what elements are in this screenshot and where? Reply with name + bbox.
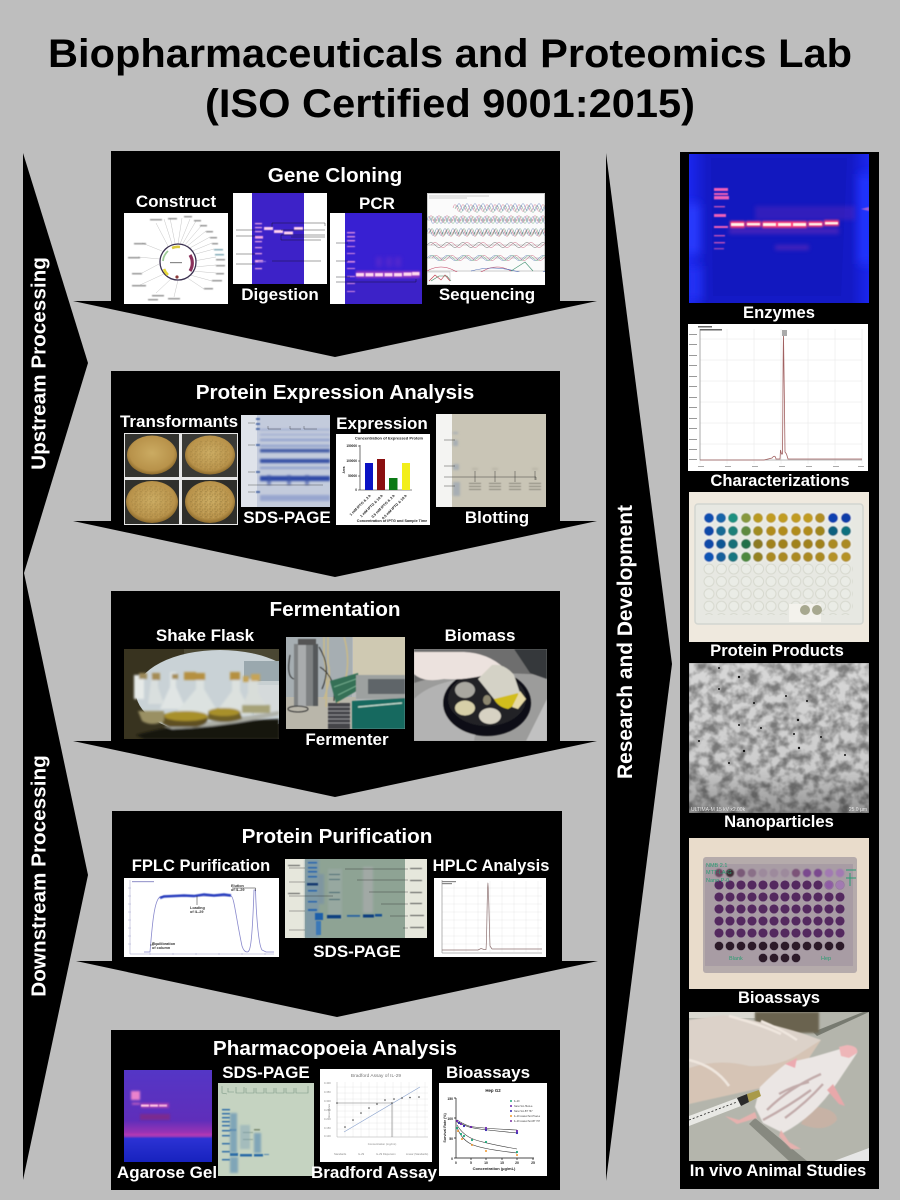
- chart: expression bars: 100000: [346, 459, 357, 463]
- chart: bradford assay: 0.350: [324, 1090, 331, 1094]
- image: western blot: [436, 414, 546, 507]
- chart: bradford assay: 0.100: [324, 1134, 331, 1138]
- label: enzymes: Enzymes: [743, 303, 815, 322]
- chart: bioassay survival curves: 5: [470, 1161, 472, 1165]
- title: Biopharmaceuticals and Proteomics Lab: [48, 32, 852, 76]
- image: bioassay plate: Nano P-0: [706, 878, 729, 884]
- label: digestion: Digestion: [241, 285, 319, 304]
- label: bradford assay: Bradford Assay: [311, 1163, 438, 1182]
- label: transformants: Transformants: [120, 412, 238, 431]
- arrow: downstream processing: [23, 573, 88, 1180]
- chart: bioassay survival curves: 50: [449, 1137, 453, 1141]
- label: sds-page: SDS-PAGE: [313, 942, 401, 961]
- label: in vivo animal studies: In vivo Animal Studies: [690, 1161, 866, 1180]
- chart: expression bars: Concentration of IPTG and Sample Time: [357, 519, 427, 523]
- chart: bradford assay: IL-29 Dispersion: [376, 1152, 396, 1156]
- image: bioassay plate: Blank: [729, 956, 743, 962]
- chart: fplc trace: Loading: [190, 906, 205, 910]
- image: in vivo mouse study: [689, 1012, 869, 1161]
- image: nanoparticles micrograph: ULTIMA-M 15 kV x2.00k: [691, 807, 746, 813]
- chart: bioassay survival curves: 15: [500, 1161, 504, 1165]
- label: bioassays: Bioassays: [446, 1063, 530, 1082]
- label: sds-page: SDS-PAGE: [243, 508, 331, 527]
- heading: gene cloning: Gene Cloning: [268, 164, 402, 187]
- panel: gene cloning: [73, 151, 597, 357]
- image: nanoparticles micrograph: 25.0 µm: [849, 807, 867, 813]
- chart: fplc trace: of IL-29: [231, 888, 245, 892]
- image: fermenter: [286, 637, 405, 729]
- chart: expression bars: 0.5 mM IPTG & 3 h: [371, 494, 396, 519]
- chart: bioassay survival curves: 20: [515, 1161, 519, 1165]
- chart: expression bars: Area: [342, 466, 346, 474]
- panel: protein purification: [76, 811, 598, 1017]
- chart: fplc trace: Equilibration: [152, 942, 176, 946]
- heading: protein expression analysis: Protein Expression Analysis: [196, 381, 474, 404]
- label: biomass: Biomass: [445, 626, 515, 645]
- chart: bioassay survival curves: Concentration (µg/mL): [473, 1166, 516, 1171]
- image: pcr gel: [330, 213, 422, 304]
- image: agarose gel: [124, 1070, 212, 1162]
- label: expression: Expression: [336, 414, 428, 433]
- label: blotting: Blotting: [465, 508, 529, 527]
- label: fermenter: Fermenter: [305, 730, 389, 749]
- chart: expression bars: 1 mM IPTG & 18 h: [359, 494, 384, 518]
- chart: bradford assay: 0.300: [324, 1099, 331, 1103]
- label: hplc analysis: HPLC Analysis: [433, 857, 549, 875]
- chart: bradford assay: 0.400: [324, 1081, 331, 1085]
- chart: bradford assay: Linear (Standards): [406, 1152, 428, 1156]
- chart: bioassay survival curves: Nano Sor-BT 767: [514, 1110, 533, 1113]
- chart: bioassay survival curves: IL-29 coated Sor-BT 767: [514, 1120, 541, 1123]
- heading: protein purification: Protein Purification: [242, 825, 432, 848]
- chart: expression bars: 1 mM IPTG & 3 h: [349, 494, 372, 517]
- chart: expression bars: 0: [355, 488, 357, 492]
- chart: bradford assay: Standards: [334, 1152, 347, 1156]
- panel: protein expression analysis: [73, 371, 597, 577]
- label: sequencing: Sequencing: [439, 285, 535, 304]
- chart: bioassay survival curves: 25: [531, 1161, 535, 1165]
- image: biomass centrifuge: [414, 649, 547, 741]
- image: pharmacopoeia sds-page: [218, 1083, 314, 1176]
- chart: fplc trace: of column: [152, 946, 171, 950]
- arrow: upstream processing: [23, 153, 88, 573]
- title: [48, 32, 852, 126]
- chart: bioassay survival curves: [439, 1083, 547, 1176]
- arrow: downstream processing: Downstream Processing: [28, 755, 50, 997]
- arrow: research and development: [606, 153, 672, 1181]
- arrow: upstream processing: Upstream Processing: [28, 257, 50, 470]
- image: bioassay plate: Hep: [821, 956, 831, 962]
- title: (ISO Certified 9001:2015): [205, 82, 695, 126]
- chart: bradford assay: 0.200: [324, 1117, 331, 1121]
- label: agarose gel: Agarose Gel: [117, 1163, 217, 1182]
- chart: expression bars: 150000: [346, 444, 357, 448]
- heading: pharmacopoeia analysis: Pharmacopoeia Analysis: [213, 1037, 457, 1060]
- panel: fermentation: [73, 591, 597, 797]
- label: construct: Construct: [136, 192, 216, 211]
- heading: fermentation: Fermentation: [269, 598, 401, 621]
- chart: bradford assay: [320, 1069, 432, 1162]
- chart: bioassay survival curves: 10: [484, 1161, 488, 1165]
- chart: fplc trace: Elution: [231, 884, 245, 888]
- label: protein products: Protein Products: [710, 641, 844, 660]
- chart: characterization chromatogram: [688, 324, 868, 471]
- chart: expression bars: Concentration of Expressed Protein: [355, 436, 424, 440]
- image: plasmid construct map: [124, 213, 228, 304]
- image: bioassay plate: [689, 838, 869, 989]
- label: fplc purification: FPLC Purification: [132, 857, 270, 875]
- chart: hplc trace: [434, 878, 546, 957]
- chart: bradford assay: Bradford Assay of IL-29: [351, 1073, 401, 1079]
- image: purification sds-page: [285, 859, 427, 938]
- chart: bioassay survival curves: 0: [455, 1161, 457, 1165]
- label: nanoparticles: Nanoparticles: [724, 812, 834, 831]
- chart: fplc trace: of IL-29: [190, 910, 204, 914]
- chart: expression bars: [336, 434, 430, 525]
- chart: bradford assay: 0.150: [324, 1126, 331, 1130]
- image: bioassay plate: MTT-LA-G: [706, 870, 732, 876]
- image: transformant plates: [124, 433, 238, 525]
- chart: bioassay survival curves: Hep G2: [485, 1088, 501, 1093]
- label: shake flask: Shake Flask: [156, 626, 255, 645]
- panel: pharmacopoeia analysis: [111, 1030, 560, 1190]
- chart: expression bars: 0.5 mM IPTG & 18 h: [381, 494, 408, 520]
- chart: bradford assay: IL-29: [358, 1152, 365, 1156]
- chart: bioassay survival curves: 0: [451, 1157, 453, 1161]
- chart: bradford assay: Absorbance: [327, 1103, 331, 1118]
- image: sds-page expression gel: [241, 415, 330, 507]
- chart: bioassay survival curves: IL-29: [514, 1100, 520, 1103]
- image: protein products plate: [689, 492, 869, 642]
- image: shake flasks: [124, 649, 279, 739]
- arrow: research and development: Research and Development: [614, 505, 637, 779]
- image: digestion gel: [233, 193, 327, 284]
- chart: bioassay survival curves: 150: [447, 1097, 453, 1101]
- chart: bioassay survival curves: IL-29 coated Sor-HiveLa: [514, 1115, 541, 1118]
- chart: bradford assay: Concentration (mg/mL): [368, 1142, 396, 1146]
- image: enzymes gel: [689, 154, 869, 303]
- chart: bradford assay: 0.250: [324, 1108, 331, 1112]
- image: bioassay plate: NMB 2.1: [706, 863, 727, 869]
- label: characterizations: Characterizations: [710, 471, 850, 490]
- image: nanoparticles micrograph: [689, 663, 869, 813]
- image: sequencing chromatogram: [427, 193, 545, 285]
- label: pcr: PCR: [359, 194, 395, 213]
- chart: fplc trace: [124, 878, 279, 957]
- label: sds-page: SDS-PAGE: [222, 1063, 310, 1082]
- label: bioassays: Bioassays: [738, 988, 820, 1007]
- chart: bioassay survival curves: Survival Rate (%): [443, 1113, 447, 1143]
- panel: research and development images: [680, 152, 879, 1189]
- chart: expression bars: 50000: [348, 474, 357, 478]
- chart: bioassay survival curves: Nano Sor-HiveLa: [514, 1105, 533, 1108]
- chart: bioassay survival curves: 100: [447, 1117, 453, 1121]
